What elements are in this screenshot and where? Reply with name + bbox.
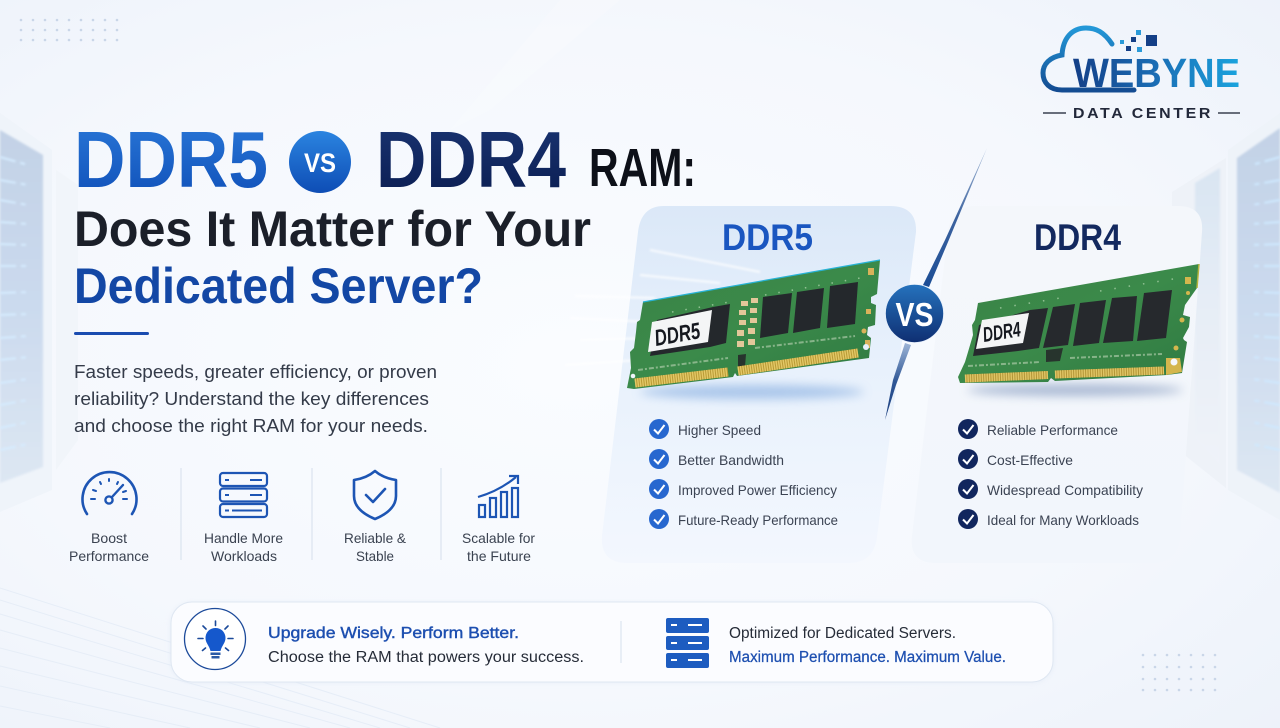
benefit: handle more workloads: Workloads <box>211 548 277 564</box>
icon: server stack <box>220 473 267 517</box>
speed lines <box>565 250 760 365</box>
benefit: boost performance <box>69 472 149 564</box>
icon: data pixels <box>1120 30 1157 52</box>
logo subtitle: DATA CENTER <box>1073 106 1213 122</box>
decoration: dot grid top left <box>20 19 118 41</box>
pads <box>862 268 874 348</box>
DDR4 feature list: Cost-Effective <box>987 452 1073 468</box>
chip label <box>976 313 1029 349</box>
gold contacts <box>635 353 858 383</box>
chip label: DDR5 <box>652 317 703 351</box>
benefit: scalable for the future: the Future <box>467 548 531 564</box>
banner message left: Choose the RAM that powers your success. <box>268 649 584 666</box>
benefit: handle more workloads: Handle More <box>204 530 283 546</box>
icon: growth chart <box>478 476 518 517</box>
badge: vs: VS <box>304 148 336 178</box>
chips <box>650 282 858 368</box>
DDR4 memory module <box>958 264 1199 383</box>
title: DDR5: DDR5 <box>74 115 268 204</box>
title: DDR4: DDR4 <box>376 115 566 204</box>
DDR5 feature list: Improved Power Efficiency <box>678 482 837 498</box>
banner message right <box>729 625 1006 666</box>
benefits row <box>69 468 535 564</box>
DDR4 feature list: Widespread Compatibility <box>987 482 1143 498</box>
DDR4 feature list: Reliable Performance <box>987 422 1118 438</box>
traces <box>638 336 855 370</box>
chips <box>973 290 1172 362</box>
intro paragraph: and choose the right RAM for your needs. <box>74 415 428 436</box>
DDR5 feature list: Future-Ready Performance <box>678 512 838 528</box>
heading: DDR4: DDR4 <box>1034 217 1121 258</box>
icon: shield check <box>354 471 396 519</box>
DDR4 feature list <box>958 419 1143 529</box>
benefit: handle more workloads <box>204 473 283 564</box>
intro paragraph <box>74 361 437 436</box>
title block <box>74 115 696 314</box>
badge: center VS: VS <box>896 296 934 333</box>
benefit: boost performance: Boost <box>91 530 127 546</box>
benefit: reliable and stable: Reliable & <box>344 530 407 546</box>
title line 2: Does It Matter for Your <box>74 201 591 257</box>
panel: DDR5 card <box>565 206 916 563</box>
banner message left: Upgrade Wisely. Perform Better. <box>268 625 519 642</box>
decoration: dot grid bottom right <box>1142 654 1216 691</box>
benefit: boost performance: Performance <box>69 548 149 564</box>
intro paragraph: Faster speeds, greater efficiency, or proven <box>74 361 437 382</box>
icon: servers <box>666 618 709 668</box>
gold contacts <box>965 370 1164 378</box>
DDR4 feature list: Ideal for Many Workloads <box>987 512 1139 528</box>
icon: gauge <box>82 472 136 514</box>
logo wordmark: WEBYNE <box>1073 50 1240 96</box>
pads <box>1166 277 1191 375</box>
heading: DDR5: DDR5 <box>722 217 813 258</box>
panel: bottom banner <box>171 602 1053 682</box>
banner message left <box>268 625 584 666</box>
logo: Webyne Data Center <box>1043 28 1240 122</box>
DDR5 feature list <box>649 419 838 529</box>
benefit: scalable for the future <box>462 476 535 564</box>
banner message right: Optimized for Dedicated Servers. <box>729 625 956 642</box>
DDR5 feature list: Better Bandwidth <box>678 452 784 468</box>
benefit: reliable and stable: Stable <box>356 548 394 564</box>
icon: cloud outline <box>1043 28 1134 90</box>
traces <box>968 354 1162 366</box>
diagonal divider <box>885 148 987 420</box>
DDR5 memory module <box>627 260 880 389</box>
DDR5 feature list: Higher Speed <box>678 422 761 438</box>
badge: vs <box>289 131 351 193</box>
banner message right: Maximum Performance. Maximum Value. <box>729 649 1006 666</box>
icon: lightbulb <box>184 608 246 670</box>
server rack left <box>0 113 78 512</box>
title line 3: Dedicated Server? <box>74 258 483 314</box>
title: RAM: RAM: <box>589 138 696 198</box>
intro paragraph: reliability? Understand the key differences <box>74 388 429 409</box>
capacitors <box>737 298 758 347</box>
badge: center VS <box>886 284 944 342</box>
panel: DDR4 card <box>912 206 1202 563</box>
accent rule <box>74 332 149 335</box>
benefit: scalable for the future: Scalable for <box>462 530 535 546</box>
server rack right <box>1172 113 1280 520</box>
chip label: DDR4 <box>981 318 1023 347</box>
benefit: reliable and stable <box>344 471 407 564</box>
shadow under module <box>640 385 864 399</box>
shadow under module <box>967 384 1183 396</box>
